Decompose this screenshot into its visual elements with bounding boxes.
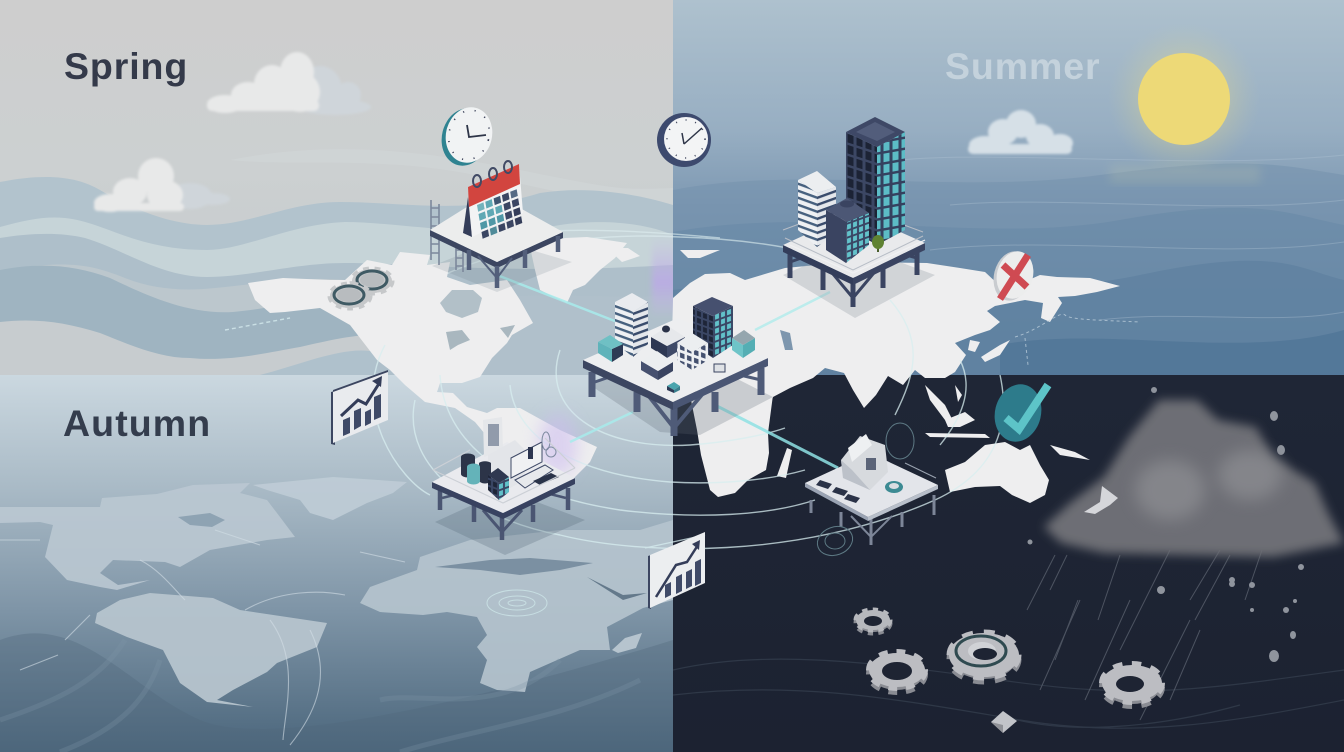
- autumn service block: [488, 440, 525, 488]
- autumn gauges: [542, 432, 556, 457]
- map: australia: [945, 442, 1049, 503]
- platform shadow: [783, 245, 935, 318]
- storm cloud highlight: [1135, 450, 1282, 520]
- hub tower dark: [693, 297, 733, 358]
- gear: left large: [869, 653, 925, 690]
- autumn railing: [433, 438, 575, 503]
- mid tower: [826, 198, 869, 263]
- icon: red cross badge: [988, 247, 1038, 305]
- ladders: [431, 200, 463, 272]
- faded map: greenland landmass: [253, 477, 407, 520]
- faded map: mediterranean: [435, 558, 593, 575]
- winter ring: [885, 481, 903, 493]
- autumn pale building: [483, 417, 503, 457]
- plant: [872, 235, 884, 252]
- autumn dark building: [488, 468, 509, 500]
- faded map: canada landmass: [0, 483, 295, 590]
- map: greenland: [530, 237, 627, 303]
- summer cloud: [968, 110, 1073, 154]
- autumn current strokes: [0, 530, 405, 745]
- spring cloud large: [207, 52, 371, 115]
- sun: [1108, 23, 1260, 183]
- map: caspian sea: [780, 330, 793, 350]
- faded map: hudson bay: [178, 513, 225, 527]
- map: southeast asia islands: [925, 385, 1090, 460]
- gear: right: [1102, 665, 1162, 704]
- orbit rings over map: [225, 300, 1003, 549]
- map: madagascar: [777, 448, 792, 478]
- gear: small rear: [352, 269, 392, 293]
- platform: autumn plant: [432, 417, 585, 555]
- map: north america: [248, 252, 597, 490]
- gear: centre ringed: [949, 633, 1019, 679]
- connector: spring platform to hub: [497, 275, 625, 325]
- icon: clock navy: [657, 113, 711, 167]
- sparkle dots: [1028, 387, 1304, 662]
- title: Summer: Summer: [945, 45, 1100, 87]
- icon: clock teal: [436, 102, 498, 171]
- platform legs: [469, 236, 558, 288]
- orbit rings behind map: [380, 230, 905, 312]
- map: japan and korea: [968, 340, 1010, 362]
- platform shadow: [432, 240, 572, 292]
- connector: summer platform to hub: [755, 292, 830, 330]
- gear: small front: [330, 284, 370, 308]
- map: new zealand: [1084, 486, 1118, 514]
- winter solar panels: [816, 480, 860, 503]
- map: africa: [690, 395, 773, 497]
- small cube: [991, 711, 1017, 733]
- platform: summer towers: [783, 117, 935, 318]
- faded map: madagascar: [612, 633, 642, 653]
- tall tower: [846, 117, 905, 245]
- platform: central hub: [583, 293, 773, 436]
- faded map: red sea: [587, 577, 647, 600]
- panel: winter background: [673, 375, 1344, 752]
- purple light beam north: [651, 249, 673, 308]
- map: iceland and svalbard: [607, 248, 720, 262]
- spring cloud small: [94, 158, 230, 212]
- gears on north america: [330, 269, 392, 308]
- ripple swirl: [487, 590, 547, 616]
- chart card lower: [648, 532, 705, 609]
- panel: autumn background: [0, 375, 673, 752]
- hub block teal right: [732, 330, 755, 358]
- storm cloud: [1044, 400, 1344, 557]
- winter machine: [841, 434, 888, 490]
- purple light beam south: [538, 413, 578, 477]
- faded map: south america landmass: [95, 593, 327, 707]
- rain streaks: [1027, 550, 1262, 720]
- icon: teal check badge: [989, 379, 1048, 447]
- title: Spring: Spring: [64, 45, 188, 87]
- title: Autumn: Autumn: [63, 402, 211, 444]
- hub tower striped: [615, 293, 648, 357]
- autumn tanks: [461, 454, 491, 484]
- connector: autumn platform to hub: [570, 412, 633, 442]
- faded map: africa eurasia landmass: [360, 520, 673, 692]
- autumn dark swirls: [0, 658, 640, 752]
- connector: winter platform to hub: [715, 405, 838, 468]
- platform shadow: [590, 350, 773, 435]
- striped tower: [798, 171, 836, 247]
- map: hudson bay: [440, 290, 482, 318]
- hub block low: [641, 351, 673, 380]
- panel: summer background: [673, 0, 1344, 375]
- chart card upper: [331, 370, 388, 445]
- hub block white: [677, 333, 708, 370]
- panel: spring background: [0, 0, 673, 375]
- gear: top small: [856, 610, 890, 632]
- autumn monitor: [511, 442, 553, 488]
- map: eurasia: [672, 262, 1120, 410]
- platform: spring calendar: [430, 161, 572, 292]
- map: great lakes: [446, 325, 515, 350]
- calendar: [463, 161, 523, 239]
- hub block teal left: [598, 335, 623, 362]
- hub block navy: [651, 326, 685, 358]
- pacific dashed routes: [1015, 314, 1140, 365]
- hub small cube: [667, 382, 680, 393]
- platform shadow: [435, 490, 585, 555]
- platform: winter machinery: [805, 423, 938, 560]
